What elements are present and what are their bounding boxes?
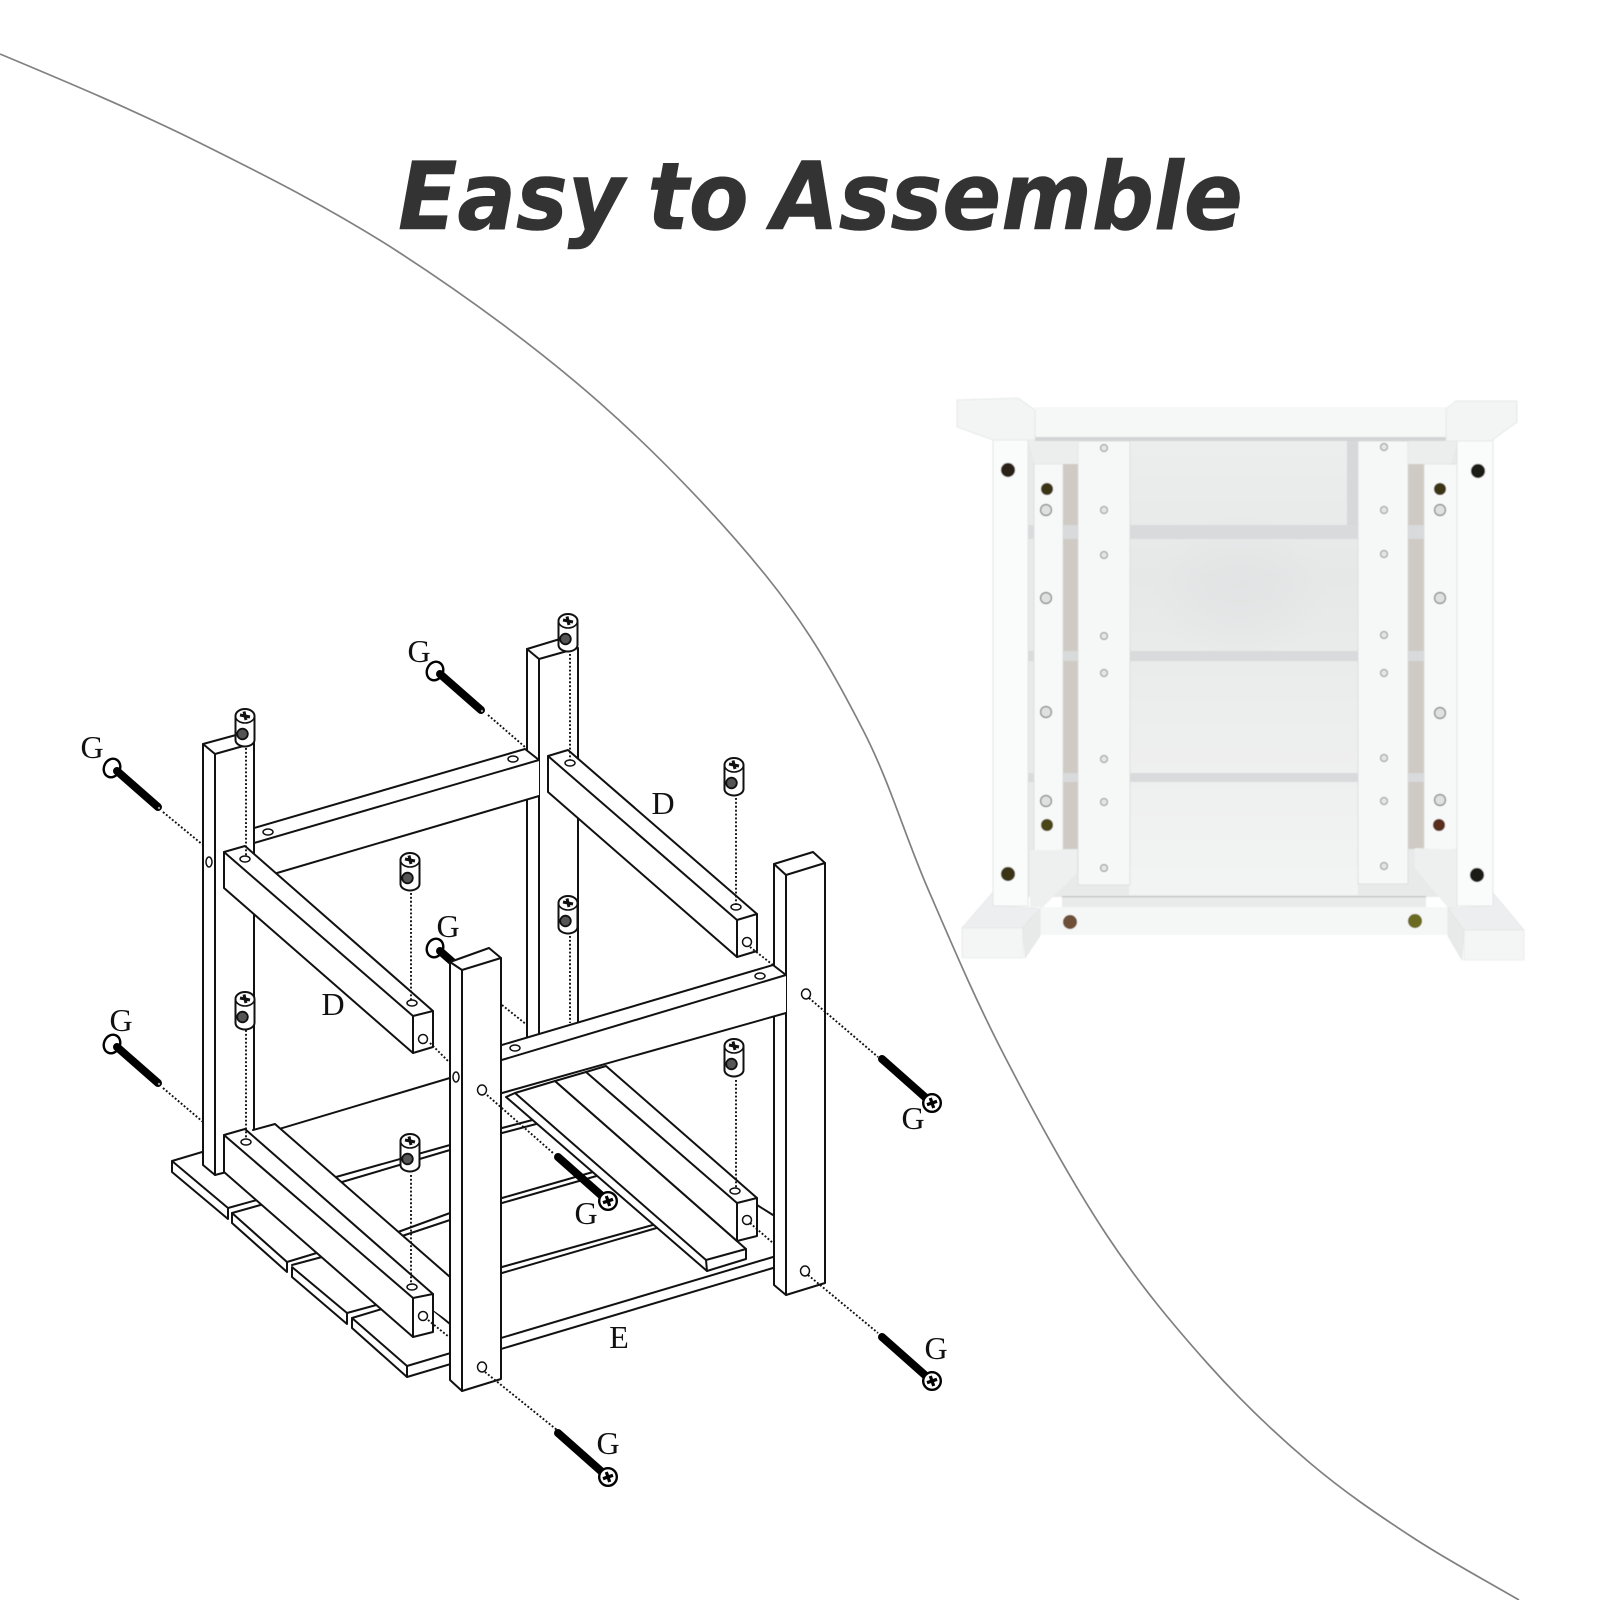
part D: lower right bar (555, 1066, 757, 1241)
part D: lower left bar (224, 1129, 433, 1337)
part D: upper left bar (224, 846, 433, 1053)
lower braces (1030, 848, 1457, 908)
part labels: G (80, 729, 104, 765)
part labels: G (109, 1002, 133, 1038)
legs (993, 439, 1493, 906)
part labels (80, 633, 948, 1461)
screw G behind front left post (424, 936, 483, 989)
wide battens (1078, 441, 1408, 885)
dotted assembly guide lines (163, 654, 878, 1430)
large screws (1040, 504, 1446, 806)
batten: left under-rail (224, 1124, 450, 1337)
part labels: E (609, 1319, 629, 1355)
slat gaps (1028, 525, 1458, 782)
part labels: G (436, 908, 460, 944)
front cross rail (495, 965, 786, 1095)
top feet (957, 398, 1517, 441)
table-top plate with slats (172, 1063, 773, 1377)
back cross rail (254, 749, 539, 880)
batten: right under-rail (506, 1081, 746, 1271)
part labels: G (574, 1195, 598, 1231)
front right post (774, 852, 825, 1295)
bottom feet (962, 892, 1524, 960)
barrel nuts (236, 614, 744, 1172)
narrow battens (1034, 464, 1457, 851)
part labels: G (596, 1425, 620, 1461)
part labels: D (651, 785, 675, 821)
stool backing (1028, 441, 1458, 897)
part labels: G (924, 1330, 948, 1366)
assembly diagram (80, 614, 948, 1486)
part labels: D (321, 986, 345, 1022)
title: Easy to Assemble (398, 143, 1243, 252)
back right post (527, 639, 578, 1040)
screws G (101, 659, 941, 1486)
seat plank (1129, 441, 1358, 895)
part D: upper right bar (548, 750, 757, 957)
small screws (1100, 444, 1388, 872)
front left post (450, 948, 501, 1391)
top rail (1035, 407, 1446, 441)
part labels: G (901, 1100, 925, 1136)
wood-tone gaps (1063, 464, 1424, 849)
back left post (203, 735, 254, 1175)
part labels: G (407, 633, 431, 669)
upper braces (1028, 440, 1458, 464)
dark dowel holes (1000, 462, 1486, 930)
bottom rail (1040, 896, 1448, 935)
product photo: stool underside (957, 398, 1524, 960)
